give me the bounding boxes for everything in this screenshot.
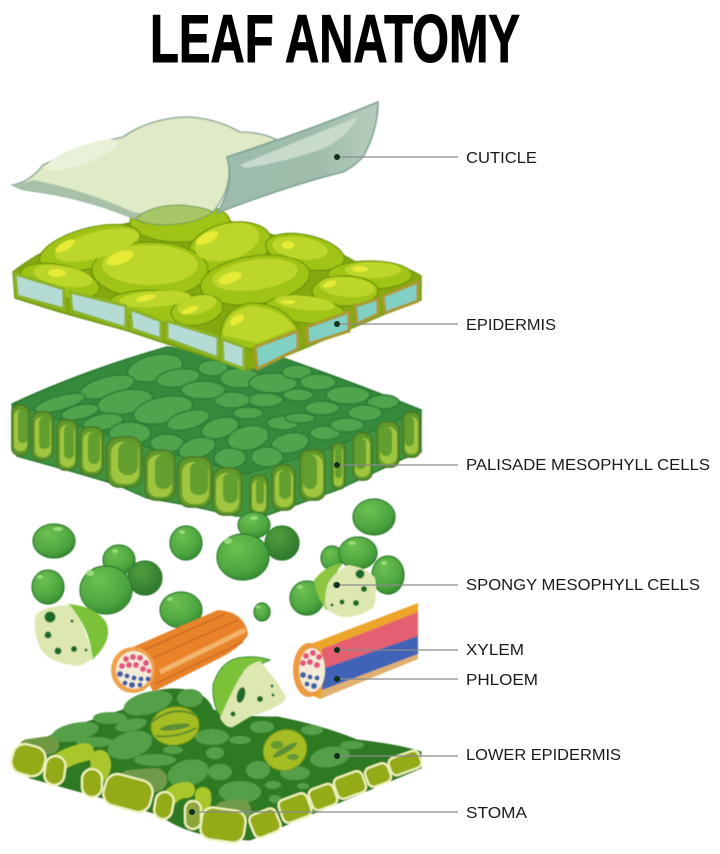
- cut cell pale face: [220, 661, 286, 727]
- callout: spongy mesophyll cells: [334, 577, 700, 594]
- palisade cell interiors: [14, 410, 418, 512]
- panel: lower epidermis layer: [9, 686, 423, 844]
- cut cell, middle: [213, 657, 286, 727]
- callout: phloem: [334, 672, 538, 689]
- panel: spongy mesophyll cells: [32, 499, 418, 699]
- spongy cell highlights: [37, 516, 387, 608]
- palisade top tiles: [14, 347, 421, 474]
- cuticle highlight: [43, 134, 121, 176]
- lower epidermis base: [13, 689, 421, 840]
- stoma 2: [257, 723, 313, 777]
- panel: cuticle: [13, 102, 378, 225]
- cuticle sheet: [13, 117, 277, 219]
- cut cell holes: [230, 684, 274, 716]
- callout: xylem: XYLEM: [466, 642, 524, 659]
- callout: lower epidermis: [334, 747, 621, 764]
- title: LEAF ANATOMY: [150, 1, 520, 77]
- epidermis top bulges: [32, 216, 401, 343]
- orange vascular bundle: [111, 610, 248, 693]
- cut cell green rim: [213, 657, 270, 718]
- callout: lower epidermis: LOWER EPIDERMIS: [466, 747, 621, 764]
- cuticle fold: [217, 102, 378, 213]
- palisade base: [12, 347, 421, 517]
- stoma 1: [149, 704, 201, 748]
- callout: xylem: [334, 642, 524, 659]
- lower epidermis front cells: [9, 741, 423, 844]
- cuticle fold highlight: [240, 117, 358, 168]
- callout: palisade mesophyll cells: PALISADE MESOPHYLL CELLS: [466, 457, 710, 474]
- epidermis front cells, right face: [255, 282, 418, 369]
- palisade front cells: [12, 405, 420, 515]
- epidermis base: [13, 210, 421, 370]
- callout: spongy mesophyll cells: SPONGY MESOPHYLL CELLS: [466, 577, 700, 594]
- cuticle bulge seen through film: [135, 205, 213, 225]
- lower epidermis tiles: [50, 686, 364, 803]
- lower epidermis tube stems: [28, 745, 240, 812]
- callout: cuticle: CUTICLE: [466, 150, 537, 167]
- epidermis cell bodies: [18, 202, 412, 350]
- cut cell, left: [35, 604, 108, 666]
- cut cell, right: [314, 563, 376, 617]
- xylem and phloem tube: [293, 603, 418, 699]
- spongy cells: [32, 499, 404, 628]
- cuticle bottom band: [13, 180, 160, 218]
- callout: epidermis: [334, 317, 556, 334]
- callout: palisade mesophyll cells: [334, 457, 710, 474]
- epidermis front cells, left face: [15, 274, 244, 369]
- panel: epidermis layer: [13, 202, 421, 370]
- callout: stoma: STOMA: [466, 805, 528, 822]
- panel: palisade mesophyll layer: [12, 347, 421, 517]
- callout: stoma: [189, 805, 528, 822]
- callout: phloem: PHLOEM: [466, 672, 538, 689]
- callout: cuticle: [334, 150, 537, 167]
- callout: epidermis: EPIDERMIS: [466, 317, 556, 334]
- epidermis highlights: [48, 228, 368, 328]
